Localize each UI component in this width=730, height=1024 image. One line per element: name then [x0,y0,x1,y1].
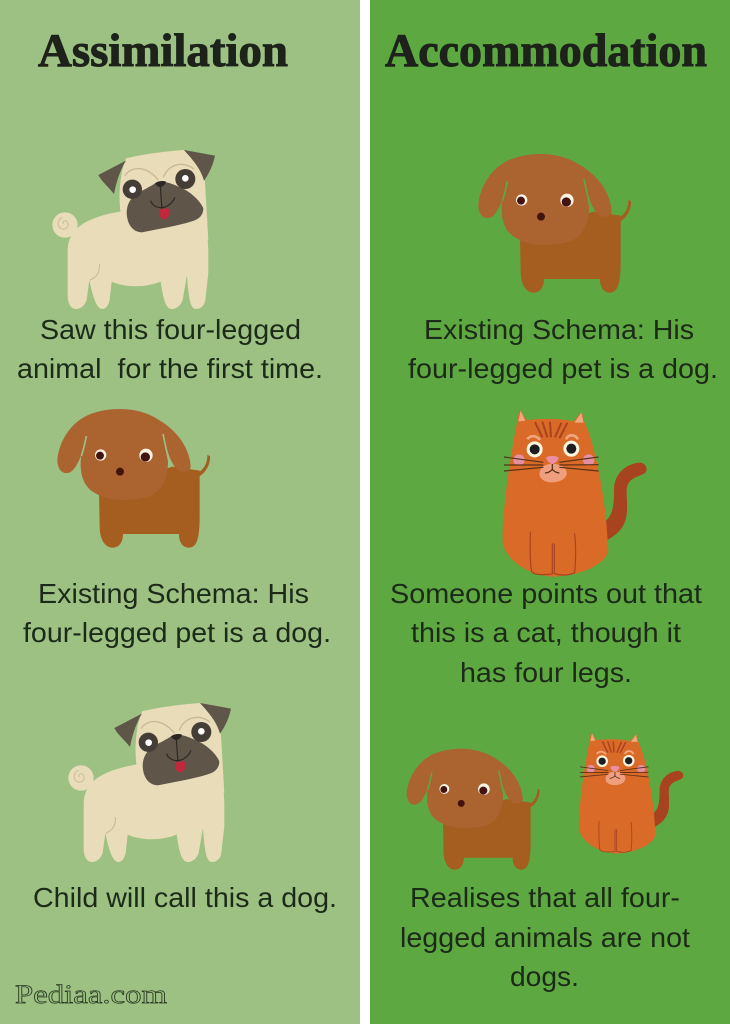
icon: small cat [579,732,683,853]
text: existing schema: four-legged pet is a dog. [23,617,331,648]
icon: pug [52,150,215,309]
text: realises: dogs. [510,961,579,992]
text: child will call this a dog: Child will call this a dog. [33,882,337,913]
logo: Pediaa.com: Pediaa.com [15,980,167,1009]
panel: accommodation [370,0,730,1024]
text: existing schema: Existing Schema: His [424,314,694,345]
icon: dog [478,154,631,293]
text: existing schema: four-legged pet is a dog. [408,353,718,384]
text: saw this animal [17,314,323,384]
text: saw this animal: Saw this four-legged [40,314,301,345]
text: someone points out: Someone points out that [390,578,702,609]
text: someone points out [390,578,702,688]
icon: second pug [68,703,231,862]
text: realises: legged animals are not [400,922,690,953]
heading: Accommodation: Accommodation [385,25,707,77]
icon: dog [57,409,210,548]
text: someone points out: has four legs. [460,657,632,688]
text: existing schema: Existing Schema: His [38,578,309,609]
heading: Assimilation: Assimilation [38,25,288,77]
text: someone points out: this is a cat, though it [411,617,681,648]
icon: cat [503,409,647,577]
text: saw this animal: animal for the first time. [17,353,323,384]
panel: assimilation [0,0,360,1024]
text: realises: Realises that all four- [410,882,680,913]
text: realises [400,882,690,992]
text: existing schema [23,578,331,648]
text: existing schema [408,314,718,384]
icon: small dog [407,749,540,870]
